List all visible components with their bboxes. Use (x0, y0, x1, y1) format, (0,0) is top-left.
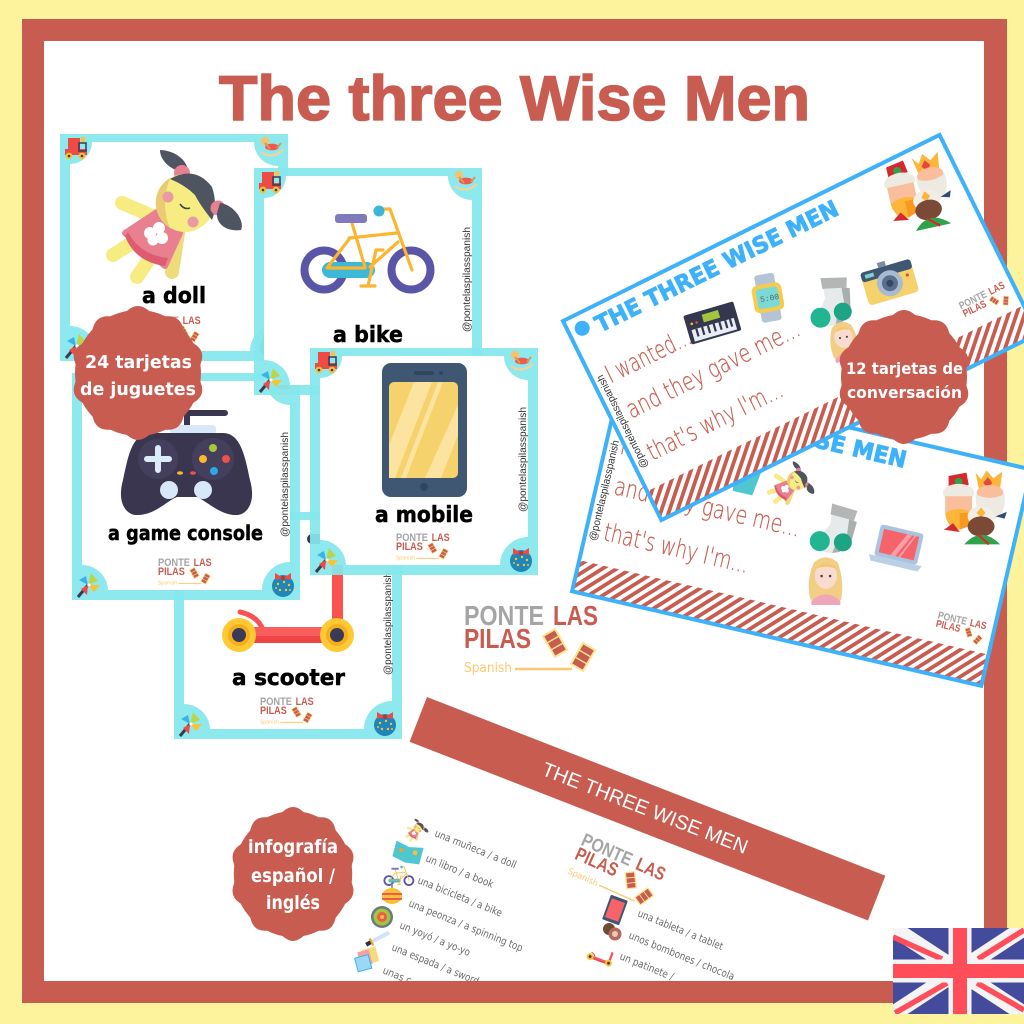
small logo (260, 696, 314, 726)
conversation lines: and they gave me... (612, 472, 803, 543)
badge: infografia: español / (251, 865, 335, 887)
vocabulary list right column (618, 908, 736, 983)
conversation lines (600, 277, 825, 468)
social handle: @pontelaspilasspanish (461, 227, 473, 332)
small logo (934, 611, 988, 646)
vocabulary list right column: unos bombones / chocola (627, 930, 736, 983)
scooter handlebar (307, 534, 343, 578)
small logo (958, 280, 1013, 325)
small logo: PILAS (961, 299, 989, 320)
vocabulary list left column (381, 828, 525, 988)
conversation lines (598, 431, 813, 588)
badge: infografia: infografía (248, 836, 338, 858)
vocabulary list left column: unas c (381, 965, 413, 987)
small logo: LAS (987, 280, 1007, 298)
small logo: PONTE (958, 289, 989, 312)
vocabulary list left column: una peonza / a spinning top (407, 898, 525, 955)
vocabulary list left column: un yoyó / a yo-yo (398, 920, 472, 959)
icon: scooter (222, 577, 354, 652)
small logo: LAS (296, 696, 314, 708)
social handle: @pontelaspilasspanish (382, 572, 394, 675)
small logo: PILAS (147, 324, 174, 336)
flashcard: bike (254, 168, 482, 395)
icon: mobile phone (382, 363, 467, 497)
small logo: PONTE (396, 532, 428, 544)
label: a bike: a bike (333, 323, 403, 348)
icon: three wise men (943, 470, 1007, 544)
conversation lines: that's why I'm... (601, 517, 752, 579)
main logo: PONTE (464, 600, 544, 631)
small logo: PILAS (935, 619, 961, 635)
gift icons (708, 449, 938, 628)
small logo (147, 315, 201, 342)
infographic logo: PONTE (578, 829, 636, 870)
conversation lines: I wanted... (618, 431, 714, 480)
social handle: @pontelaspilasspanish (517, 407, 529, 512)
badge: infografia: inglés (266, 892, 320, 914)
badge: 24 tarjetas (62, 297, 214, 449)
infographic logo: Spanish (566, 867, 599, 889)
vocabulary icons (353, 819, 628, 972)
badge: 12 tarjetas (828, 301, 980, 453)
vocabulary list right column: un patinete / (618, 951, 676, 983)
small logo: Spanish (158, 581, 177, 587)
badge: 12 tarjetas: conversación (847, 383, 962, 402)
badge: 24 tarjetas: de juguetes (80, 379, 196, 400)
flashcard: scooter (174, 512, 402, 739)
vocabulary list left column: un libro / a book (424, 853, 496, 891)
small logo: LAS (432, 532, 450, 544)
vocabulary list left column: una espada / a sword (390, 942, 481, 988)
small logo: LAS (183, 315, 201, 327)
infographic logo: PILAS (572, 843, 622, 880)
badge: 12 tarjetas: 12 tarjetas de (846, 359, 963, 378)
small logo: PILAS (396, 541, 423, 553)
icon: three wise men (879, 150, 958, 235)
small logo: PONTE (937, 611, 968, 628)
small logo: PONTE (260, 696, 292, 708)
icon: game controller (121, 413, 252, 515)
main logo (464, 600, 598, 676)
icon: bicycle (304, 206, 430, 290)
vocabulary list left column: una bicicleta / a bike (416, 875, 504, 919)
social handle: @pontelaspilasspanish (587, 439, 622, 542)
infographic logo (566, 829, 669, 912)
social handle: @pontelaspilasspanish (279, 432, 291, 537)
card heading: THE THREE WISE MEN (642, 388, 909, 474)
badge: infografia (222, 798, 364, 950)
social handle: @pontelaspilasspanish (594, 373, 651, 470)
gift icons (676, 209, 941, 423)
main logo: LAS (553, 600, 598, 631)
vocabulary list right column: una tableta / a tablet (636, 908, 725, 953)
small logo: PILAS (260, 705, 287, 717)
flashcard: doll (60, 134, 288, 361)
main logo: Spanish (464, 661, 512, 676)
small logo: PONTE (147, 315, 179, 327)
infographic header band (410, 697, 885, 920)
label: a game console: a game console (108, 521, 263, 545)
conversation card: front (562, 134, 1024, 520)
title: The three Wise Men (219, 64, 810, 134)
label: a scooter: a scooter (232, 666, 345, 691)
icon: doll (113, 150, 242, 277)
label: a mobile: a mobile (375, 503, 473, 528)
flashcard: game console (72, 373, 300, 600)
heading dot (572, 318, 592, 338)
main logo: PILAS (464, 623, 531, 654)
conversation lines: and they gave me... (621, 314, 804, 424)
small logo: Spanish (260, 720, 279, 726)
small logo: PILAS (158, 566, 185, 578)
icon: UK flag (893, 928, 1024, 1014)
infographic header band: THE THREE WISE MEN (539, 759, 751, 859)
label: a doll: a doll (142, 284, 206, 309)
badge: 24 tarjetas: 24 tarjetas (85, 352, 192, 373)
vocabulary list left column: una muñeca / a doll (433, 828, 518, 871)
small logo (158, 557, 212, 587)
small logo: LAS (194, 557, 212, 569)
infographic logo: LAS (633, 853, 669, 885)
flashcard: mobile (310, 348, 538, 575)
card heading: THE THREE WISE MEN (591, 196, 843, 338)
conversation lines: that's why I'm... (642, 375, 788, 466)
conversation card: back (572, 375, 1024, 686)
small logo (396, 532, 450, 562)
small logo: Spanish (396, 556, 415, 562)
small logo: LAS (969, 618, 988, 632)
conversation lines: I wanted... (600, 322, 696, 389)
infographic preview sheet (353, 697, 885, 988)
small logo: PONTE (158, 557, 190, 569)
